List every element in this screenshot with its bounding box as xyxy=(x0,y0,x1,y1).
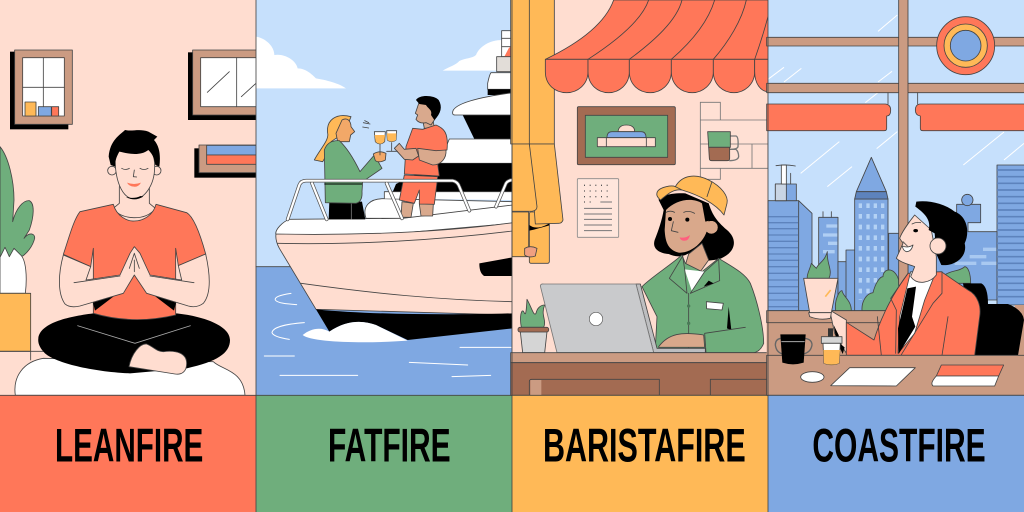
meditating man xyxy=(38,130,230,374)
icon: hanging yellow coat xyxy=(511,0,563,263)
wall calendar xyxy=(577,179,619,237)
deck railing xyxy=(288,180,512,219)
heading: BaristaFIRE: BARISTAFIRE xyxy=(543,418,746,471)
panel: BaristaFIRE xyxy=(511,0,769,512)
held plant pot xyxy=(804,252,838,319)
barista woman xyxy=(642,176,764,353)
icon: round target emblem xyxy=(937,17,995,75)
label band: LeanFIRE xyxy=(0,395,256,512)
city skyline xyxy=(768,157,1024,311)
label band: CoastFIRE xyxy=(768,395,1024,512)
icon: black coffee mug xyxy=(775,334,812,364)
heading: LeanFIRE: LEANFIRE xyxy=(55,418,203,471)
yacht xyxy=(276,31,513,342)
icon: small potted plant xyxy=(518,299,549,353)
label band: FatFIRE xyxy=(256,395,512,512)
icon: right window xyxy=(188,50,257,120)
notebook xyxy=(932,365,1004,386)
window glints xyxy=(768,15,1024,187)
icon: left window with shelf items xyxy=(10,50,72,129)
icon: left cloud xyxy=(256,37,346,88)
desk xyxy=(767,355,1024,395)
panel: LeanFIRE xyxy=(0,0,257,512)
bushes xyxy=(835,267,971,311)
saucer xyxy=(801,372,824,382)
right hanging planter xyxy=(915,104,1024,131)
counter with drawers xyxy=(511,353,769,395)
ledge and wall xyxy=(767,305,1024,357)
icon: wall shelf with books xyxy=(194,145,257,178)
icon: white floor cushion xyxy=(15,358,245,395)
white notepad xyxy=(831,368,915,386)
laptop xyxy=(540,284,705,353)
icon: potted plant on yellow stand xyxy=(0,147,43,360)
wall shelf with mug xyxy=(700,102,768,179)
heading: FatFIRE: FATFIRE xyxy=(328,418,451,471)
left hanging planter xyxy=(767,104,891,131)
man in coral suit xyxy=(830,201,980,355)
wine glasses xyxy=(374,131,397,155)
awning xyxy=(545,0,769,93)
label band: BaristaFIRE xyxy=(512,395,768,512)
woman with wine glass xyxy=(314,116,386,219)
icon: right cloud xyxy=(443,40,512,71)
sea with ripples xyxy=(256,267,512,395)
office chair xyxy=(963,283,1024,355)
framed picture xyxy=(577,107,675,165)
icon: orange juice cup xyxy=(821,328,842,365)
man with wine glass xyxy=(394,96,447,217)
window frame xyxy=(767,0,1024,285)
panel: CoastFIRE xyxy=(767,0,1024,512)
panel: FatFIRE xyxy=(256,0,513,512)
